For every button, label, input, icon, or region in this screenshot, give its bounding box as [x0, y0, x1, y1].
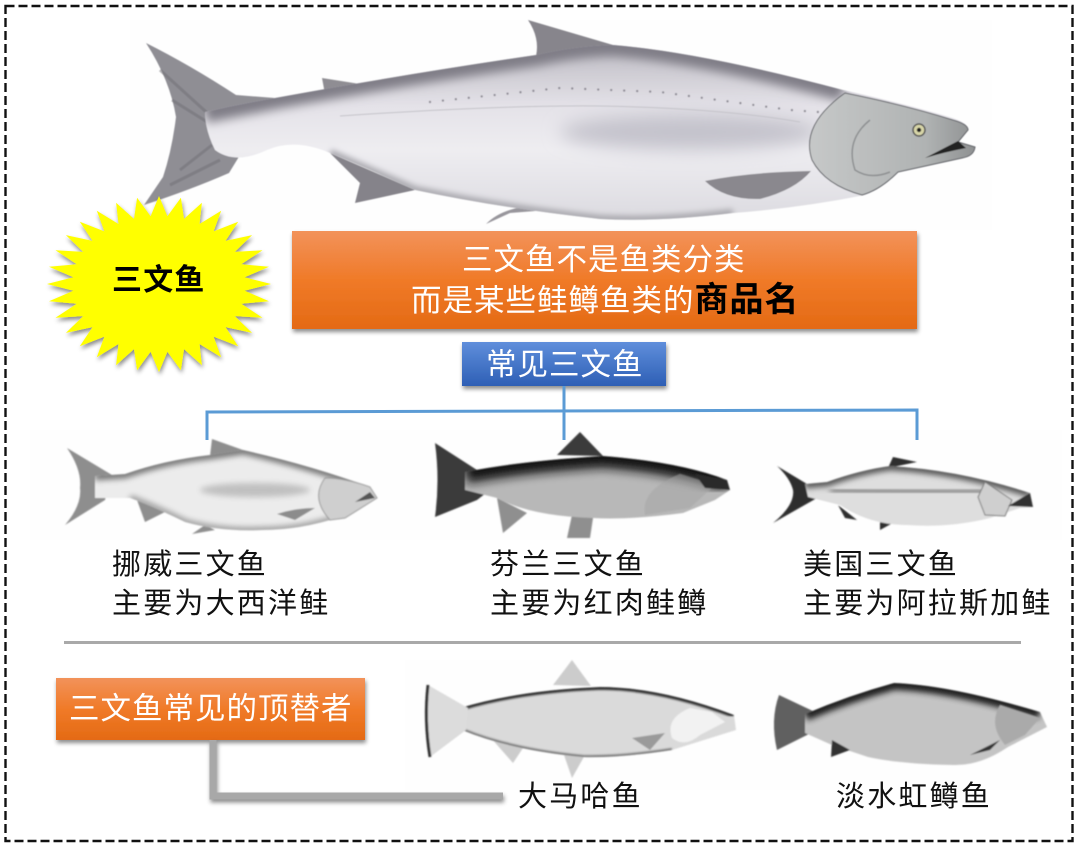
- label text: 三文鱼常见的顶替者: [69, 692, 352, 726]
- label box: [462, 342, 666, 386]
- body: [805, 683, 1047, 765]
- body: [805, 466, 1033, 526]
- pupil: [917, 128, 921, 132]
- tail rays: [160, 70, 220, 185]
- body shading: [805, 466, 1030, 493]
- name: 挪威三文鱼: [112, 548, 268, 581]
- gill: [670, 708, 725, 742]
- gill cover: [809, 93, 975, 195]
- common salmon label: [462, 342, 666, 386]
- starburst badge: [47, 196, 271, 372]
- belly shading: [130, 498, 340, 530]
- tail: [426, 685, 468, 757]
- fish: chum salmon: [426, 660, 736, 778]
- name: 芬兰三文鱼: [490, 548, 646, 581]
- fish: rainbow trout: [774, 683, 1047, 765]
- mouth: [925, 141, 966, 158]
- pectoral fin: [705, 171, 811, 199]
- label: Finland: [490, 548, 708, 620]
- elbow connector: [213, 740, 503, 796]
- label: Norway: [112, 548, 330, 620]
- flank shading: [200, 483, 310, 497]
- body: [460, 687, 736, 757]
- mouth: [355, 492, 375, 502]
- back shading: [805, 466, 1030, 493]
- species: 主要为阿拉斯加鲑: [803, 587, 1053, 620]
- back shading: [95, 450, 370, 487]
- head: [995, 705, 1040, 745]
- flank shading: [560, 114, 820, 150]
- body: [95, 450, 377, 530]
- species: 主要为红肉鲑鳟: [490, 587, 708, 620]
- fish: Norwegian salmon: [65, 439, 377, 534]
- fish: Finnish salmon: [435, 432, 730, 538]
- body shading: [460, 687, 734, 757]
- belly line: [462, 730, 672, 757]
- banner line 2: 而是某些鲑鳟鱼类的商品名: [411, 281, 800, 319]
- label: America: [803, 548, 1053, 620]
- back shading: [805, 683, 1040, 714]
- star label: 三文鱼: [112, 264, 206, 297]
- lateral line: [340, 106, 800, 122]
- label: rainbow trout: 淡水虹鳟鱼: [836, 780, 992, 813]
- species: 主要为大西洋鲑: [112, 587, 330, 620]
- fish: American salmon: [773, 457, 1033, 530]
- banner line 1: 三文鱼不是鱼类分类: [462, 243, 746, 277]
- salmon body: [205, 45, 975, 220]
- body: [465, 456, 730, 518]
- mouth: [1008, 493, 1033, 507]
- tail fin: [144, 43, 275, 205]
- substitutes label: [56, 678, 365, 740]
- eye: [913, 124, 925, 136]
- snout: [695, 474, 730, 490]
- back shading: [205, 45, 843, 112]
- cheek line: [852, 120, 890, 176]
- pectoral fin: [632, 733, 665, 750]
- fins: [491, 660, 591, 778]
- ventral fin: [486, 205, 552, 224]
- tail edge: [426, 685, 430, 757]
- head: [319, 478, 377, 520]
- tail and fins: [773, 457, 975, 530]
- head detail: [644, 474, 715, 515]
- headline banner: [292, 231, 917, 329]
- label box: [56, 678, 365, 740]
- name: 美国三文鱼: [803, 548, 959, 581]
- fins: [831, 740, 1000, 757]
- tail and fins: [435, 432, 603, 517]
- tail: [774, 695, 815, 750]
- star shape: [47, 196, 271, 372]
- divider: [64, 641, 1021, 644]
- banner box: [292, 231, 917, 329]
- anal fin: [330, 153, 415, 203]
- dark back: [805, 683, 1040, 714]
- lower fins: [497, 498, 593, 538]
- back spots: [430, 88, 860, 115]
- tree connector: [207, 386, 917, 440]
- label text: 常见三文鱼: [486, 348, 644, 382]
- body shading: [95, 450, 370, 530]
- flank band: [830, 490, 985, 492]
- label: chum salmon: 大马哈鱼: [518, 780, 643, 813]
- adipose fin: [322, 78, 360, 94]
- dark back: [465, 456, 727, 480]
- main salmon illustration: [144, 20, 975, 224]
- back shading: [465, 456, 727, 480]
- back line: [460, 687, 734, 715]
- body shading: [205, 45, 843, 220]
- belly shading: [330, 153, 733, 220]
- head detail: [978, 482, 1012, 516]
- tail and fins: [65, 439, 243, 534]
- pectoral fin: [277, 508, 315, 520]
- dorsal fin: [528, 20, 613, 56]
